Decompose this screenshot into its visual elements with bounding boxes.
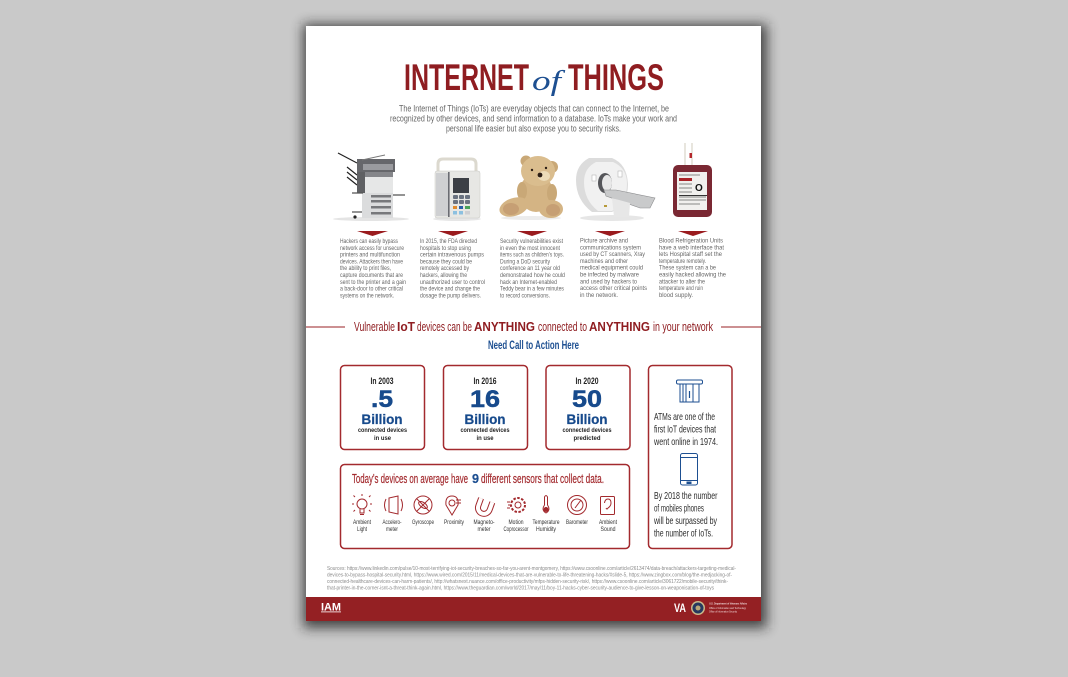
panel: 2003 stat — [340, 366, 424, 450]
sensor labels: Temperature — [532, 519, 560, 526]
text: mobiles: By 2018 the number — [654, 490, 718, 502]
text: scanners — [580, 238, 647, 299]
title: THINGS — [568, 57, 664, 98]
intro text: recognized by other devices, and send information to a database. IoTs make your work and — [390, 114, 677, 124]
intro text: personal life easier but also expose you to security risks. — [446, 124, 621, 134]
icon: accelerometer — [384, 496, 402, 514]
sources — [327, 566, 736, 592]
text: printers: the ability to print files, — [340, 265, 391, 272]
text: blood refrigeration: have a web interface that — [659, 244, 724, 251]
text: scanners: access other critical points — [580, 285, 647, 292]
sensors heading: Today's devices on average have — [352, 471, 468, 486]
sources: connected-healthcare-devices-can-harm-patients/, http://whatsnext.nuance.com/office-productivity/mfps-hidden-security-risk/, https://www.csoonline.com/article/3061722/mobile-security/think- — [327, 579, 728, 585]
department text: Office of Information Security — [709, 610, 737, 614]
sensor labels: Gyroscope — [412, 519, 434, 526]
sensor labels — [353, 519, 617, 533]
text: infusion pumps: In 2015, the FDA directed — [420, 238, 477, 245]
text: ATMs — [653, 411, 718, 448]
text: scanners: machines and other — [580, 258, 628, 265]
title: INTERNET — [404, 57, 529, 98]
text: infusion pumps: unauthorized user to control — [420, 279, 485, 286]
sources: devices-to-bypass-hospital-security.html, https://www.wired.com/2015/11/medical-devices-that-are-vulnerable-to-life-threatening-hacks/#slide-5, https://www.zingbox.com/blog/the-medjacking-of- — [327, 572, 732, 578]
page panel — [306, 26, 761, 621]
icon: infusion pump — [433, 159, 481, 221]
panel: sensors — [340, 464, 630, 548]
icon: motion coprocessor — [507, 498, 525, 512]
sensor labels: Accelero- — [382, 519, 402, 526]
text: toys: During a DoD security — [500, 258, 551, 265]
headline: Vulnerable — [354, 320, 395, 334]
headline: connected to — [538, 320, 587, 334]
panel: 2003 stat: connected devices — [358, 427, 407, 434]
VA seal — [691, 601, 705, 615]
text: blood refrigeration: attacker to alter the — [659, 278, 705, 285]
headline: ANYTHING — [474, 320, 535, 334]
text: toys: Security vulnerabilities exist — [500, 238, 563, 245]
text: infusion pumps: certain intravenous pumps — [420, 252, 484, 259]
text: infusion pumps: hackers, allowing the — [420, 272, 467, 279]
sensor labels: Light — [357, 526, 367, 533]
sensor labels: Sound — [600, 526, 616, 533]
panel: 2020 stat: Billion — [566, 412, 608, 427]
text: toys: items such as children's toys. — [500, 252, 564, 259]
sensor labels: Humidity — [536, 526, 556, 533]
sensor labels: Ambient — [599, 519, 617, 526]
text: toys: to record conversions. — [500, 292, 550, 299]
sensors heading: different sensors that collect data. — [481, 471, 604, 486]
sensor labels: Ambient — [353, 519, 371, 526]
text: infusion pumps — [420, 238, 485, 299]
text: printers: printers and multifunction — [340, 252, 400, 259]
text: ATMs: went online in 1974. — [653, 436, 718, 448]
sensor labels: Motion — [508, 519, 524, 526]
text: toys: Teddy bear in a few minutes — [500, 286, 564, 293]
text: infusion pumps: hospitals to stop using — [420, 245, 471, 252]
icon: blood bag: O — [695, 183, 703, 194]
department text — [709, 602, 747, 614]
text: mobiles: will be surpassed by — [653, 515, 717, 527]
panel: 2016 stat: in use — [476, 435, 494, 442]
text: mobiles — [653, 490, 718, 540]
text: scanners: medical equipment could — [580, 265, 643, 272]
panel: 2016 stat — [444, 366, 528, 450]
panel: 2016 stat: In 2016 — [474, 376, 496, 386]
text: blood refrigeration: Blood Refrigeration Units — [659, 238, 723, 244]
text: mobiles: the number of IoTs. — [654, 528, 713, 540]
department text: Office of Information and Technology — [709, 606, 746, 610]
text: blood refrigeration: lets Hospital staff set the — [659, 251, 722, 258]
text: infusion pumps: because they could be — [420, 258, 472, 265]
text: toys: hack an Internet-enabled — [500, 279, 557, 286]
icon: CT scanner — [576, 158, 655, 221]
sources: Sources: https://www.linkedin.com/pulse/10-most-terrifying-iot-security-breaches-so-far-you-arent-montgomery, https://www.csoonline.com/article/2613474/data-breach/attackers-targeting-medical- — [327, 566, 736, 572]
text: blood refrigeration: easily hacked allowing the — [659, 272, 726, 278]
text: ATMs: first IoT devices that — [654, 424, 716, 436]
icon: phone — [680, 454, 698, 485]
text: scanners: and used by hackers to — [580, 278, 637, 285]
panel: 2020 stat: 50 — [572, 386, 602, 413]
footer bar — [306, 597, 761, 621]
sensor labels: Magneto- — [474, 519, 494, 526]
intro text: The Internet of Things (IoTs) are everyday objects that can connect to the Internet, be — [399, 104, 669, 114]
divider lines — [306, 326, 761, 328]
panel: 2003 stat: in use — [374, 435, 391, 442]
text: printers: a back-door to other critical — [340, 286, 403, 293]
text: toys: conference an 11 year old — [500, 265, 560, 272]
icon: teddy bear — [497, 156, 563, 220]
panel: 2020 stat: predicted — [574, 435, 600, 442]
text: scanners: communications system — [580, 244, 641, 251]
panel: 2016 stat: 16 — [470, 386, 500, 413]
panel: ATMs and mobiles — [648, 366, 732, 548]
text: printers: systems on the network. — [340, 292, 394, 299]
icon: magnetometer — [476, 498, 492, 516]
panel: 2003 stat: .5 — [371, 386, 393, 413]
text: mobiles: of mobiles phones — [654, 502, 704, 514]
text: blood refrigeration: temperature remotely. — [659, 258, 706, 265]
text: printers: network access for unsecure — [340, 245, 404, 252]
icon: blood bag — [673, 143, 712, 217]
text: printers: sent to the printer and a gain — [340, 279, 406, 286]
sensor labels: Proximity — [444, 519, 464, 526]
icon: ambient light — [352, 494, 372, 514]
call to action: Need Call to Action Here — [488, 338, 579, 352]
text: printers — [340, 238, 406, 299]
text: scanners: Picture archive and — [580, 238, 628, 244]
panel: 2003 stat: Billion — [362, 412, 402, 427]
icon: barometer — [568, 496, 586, 514]
sensors heading: 9 — [472, 471, 479, 486]
icon: proximity — [446, 496, 461, 515]
title: of — [532, 65, 566, 97]
icon: gyroscope — [414, 496, 432, 514]
headline: ANYTHING — [589, 320, 650, 334]
panel: 2016 stat: Billion — [464, 412, 506, 427]
text: scanners: used by CT scanners, Xray — [580, 251, 646, 258]
headline: devices can be — [417, 320, 472, 334]
panel: 2003 stat: In 2003 — [370, 376, 394, 386]
icon: temperature — [543, 496, 549, 513]
markers: red chevrons — [357, 231, 708, 236]
panel: 2016 stat: connected devices — [460, 427, 510, 434]
icon: printer — [333, 153, 409, 221]
intro text — [390, 104, 677, 134]
text: printers: devices. Attackers then have — [340, 258, 403, 265]
IAM logo: IAM — [321, 602, 341, 614]
icon: ATM — [676, 380, 702, 402]
text: blood refrigeration: These system can a be — [659, 265, 716, 272]
icon: ambient sound — [600, 496, 614, 514]
text: infusion pumps: remotely accessed by — [420, 265, 470, 272]
text: infusion pumps: the device and change the — [420, 286, 480, 293]
page shadow — [303, 24, 767, 628]
sensor labels: meter — [386, 526, 399, 533]
text: blood refrigeration: blood supply. — [659, 292, 693, 299]
sensor labels: meter — [478, 526, 491, 533]
headline: in your network — [653, 320, 714, 334]
text: printers: Hackers can easily bypass — [340, 238, 398, 245]
sensor labels: Coprocessor — [504, 526, 529, 533]
text: scanners: in the network. — [580, 292, 618, 299]
headline — [354, 320, 714, 334]
text: blood refrigeration — [659, 238, 726, 299]
text: infusion pumps: dosage the pump delivers. — [420, 292, 481, 299]
headline: IoT — [397, 320, 415, 334]
sensor labels: Barometer — [566, 519, 589, 526]
panel: 2020 stat: In 2020 — [576, 376, 598, 386]
text: toys — [500, 238, 565, 299]
text: printers: capture documents that are — [340, 272, 403, 279]
text: toys: in even the most innocent — [500, 245, 560, 252]
text: scanners: be infected by malware — [580, 272, 639, 278]
text: ATMs: ATMs are one of the — [654, 411, 715, 423]
text: toys: demonstrated how he could — [500, 272, 565, 279]
panel: 2020 stat: connected devices — [562, 427, 612, 434]
panel: 2020 stat — [546, 366, 630, 450]
text: blood refrigeration: temperature and ruin — [659, 285, 703, 292]
department text: U.S. Department of Veterans Affairs — [709, 602, 747, 606]
sources: that-printer-in-the-corner-isnt-a-threat-think-again.html, https://www.theguardian.com/world/2017/may/11/boy-11-hacks-cyber-security-audience-to-give-lesson-on-weaponisation-of-toys — [327, 586, 714, 592]
VA logo: VA — [674, 603, 686, 615]
